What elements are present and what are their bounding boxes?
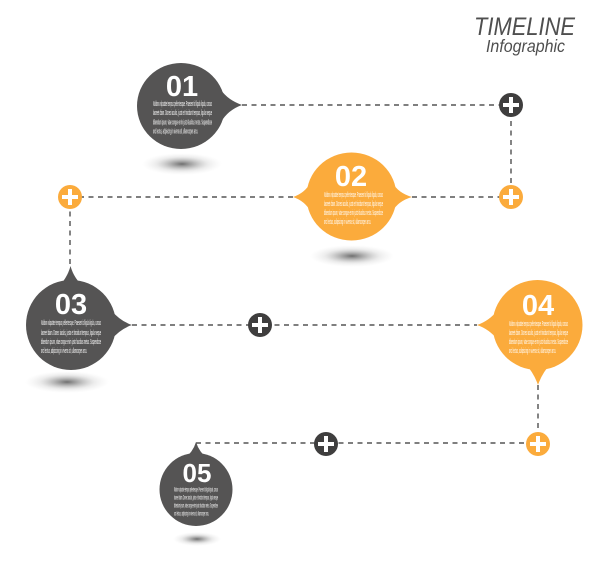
step 02 — [293, 152, 412, 267]
text: bibendum ipsum, vitae congue enim justo faucibus metus. Suspendisse — [324, 210, 383, 217]
number 01: 01 — [166, 71, 198, 103]
step 03 — [25, 266, 132, 393]
step 01: orci lectus, adipiscing in viverra sit, ullamcorper arcu. — [153, 128, 198, 136]
step 04 — [477, 280, 582, 385]
text 01 — [153, 101, 212, 136]
icon: plus dark top right — [499, 93, 523, 117]
number 04: 04 — [522, 290, 554, 322]
text 02 — [324, 192, 383, 226]
bubble 05 — [160, 442, 232, 526]
icon: plus dark bottom — [314, 432, 338, 456]
text: Nullam vulputate tempus pellentesque. Praesent id ligula ligula, cursus — [153, 101, 212, 108]
bubble 04 — [477, 280, 582, 385]
text: laoreet diam. Donec iaculis, justo et tincidunt tempus, ligula neque — [324, 201, 383, 208]
title — [474, 13, 575, 56]
shadow 02 — [310, 245, 394, 267]
step 05 — [160, 442, 232, 546]
title: Infographic — [486, 36, 565, 56]
shadow 01 — [142, 153, 222, 175]
text: orci lectus, adipiscing in viverra sit, ullamcorper arcu. — [174, 512, 209, 518]
text 05 — [174, 488, 218, 518]
text: laoreet diam. Donec iaculis, justo et tincidunt tempus, ligula neque — [153, 110, 212, 117]
shadow 03 — [25, 371, 109, 393]
text: laoreet diam. Donec iaculis, justo et tincidunt tempus, ligula neque — [174, 496, 218, 502]
timeline connector lines — [70, 105, 538, 444]
bubble 01 — [137, 63, 242, 149]
text: Nullam vulputate tempus pellentesque. Praesent id ligula ligula, cursus — [41, 320, 101, 327]
bubble 02 — [293, 152, 412, 240]
text: Nullam vulputate tempus pellentesque. Praesent id ligula ligula, cursus — [324, 192, 383, 199]
number 02: 02 — [335, 161, 367, 193]
shadow 05 — [173, 532, 221, 546]
number 03: 03 — [55, 289, 87, 321]
text: bibendum ipsum, vitae congue enim justo faucibus metus. Suspendisse — [174, 504, 218, 510]
icon: plus orange right — [499, 185, 523, 209]
number 05: 05 — [183, 458, 211, 488]
step 02: orci lectus, adipiscing in viverra sit, ullamcorper arcu. — [324, 219, 371, 226]
bubble 03 — [26, 266, 132, 370]
text: laoreet diam. Donec iaculis, justo et tincidunt tempus, ligula neque — [41, 330, 101, 337]
step 01 — [137, 63, 242, 175]
text: Nullam vulputate tempus pellentesque. Praesent id ligula ligula, cursus — [174, 488, 218, 494]
icon: plus orange bottom — [526, 432, 550, 456]
text 04 — [509, 321, 568, 355]
title: TIMELINE — [474, 13, 575, 41]
text 03 — [41, 320, 101, 355]
text: bibendum ipsum, vitae congue enim justo faucibus metus. Suspendisse — [153, 120, 212, 126]
icon: plus orange left — [58, 185, 82, 209]
text: bibendum ipsum, vitae congue enim justo faucibus metus. Suspendisse — [41, 339, 101, 346]
step 03: orci lectus, adipiscing in viverra sit, ullamcorper arcu. — [41, 348, 87, 355]
icon: plus dark middle — [248, 313, 272, 337]
